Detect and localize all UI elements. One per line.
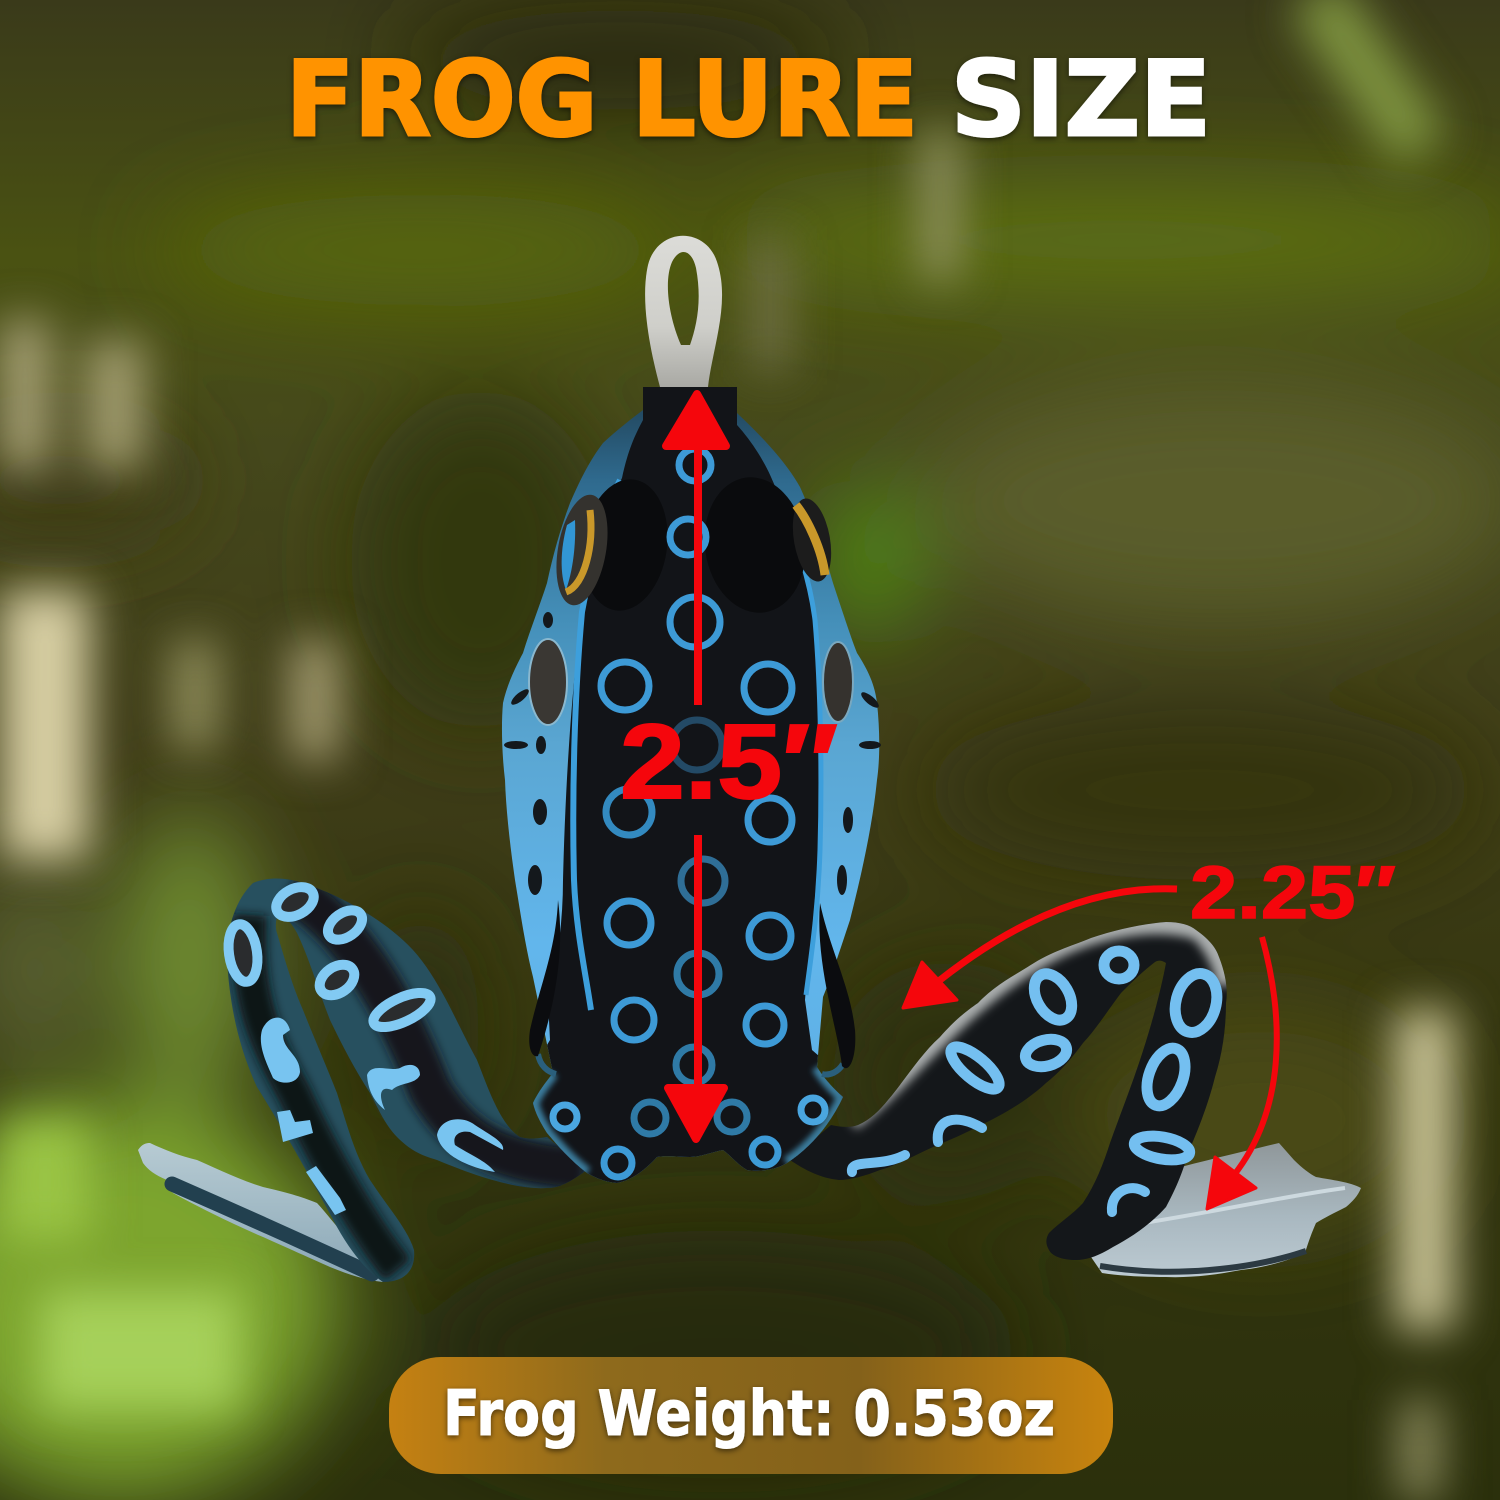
arrow: lower leg measure: [1207, 937, 1277, 1209]
title: FROG LURE: [286, 40, 918, 160]
label: leg length: 2.25″: [1190, 851, 1396, 934]
arrow: vertical 2.5 inch measure: [666, 394, 726, 1139]
weight text: Frog Weight: 0.53oz: [443, 1377, 1055, 1450]
icon: left hook: [529, 900, 560, 1074]
left leg: [220, 870, 595, 1290]
icon: right hook: [819, 903, 855, 1075]
label: body length: 2.5″: [620, 703, 838, 821]
frog body: [495, 385, 890, 1190]
black centre: [533, 387, 843, 1183]
side black marks: [504, 612, 881, 895]
right leg spots: [852, 951, 1223, 1212]
head bumps: [574, 474, 676, 616]
icon: right eye: [787, 496, 837, 584]
arrow: upper leg measure: [903, 889, 1177, 1008]
weight pill: [389, 1357, 1113, 1474]
title: SIZE: [951, 40, 1211, 160]
icon: left eye: [549, 491, 615, 609]
side dark spots: [529, 639, 567, 725]
right leg: [785, 915, 1235, 1265]
left leg spots: [225, 881, 503, 1215]
icon: line tie ring: [645, 236, 722, 387]
blue spots: [553, 449, 825, 1177]
blue sides: [495, 385, 890, 1185]
left foot: [138, 1143, 383, 1282]
lower teal rim: [533, 1067, 843, 1173]
right foot: [1091, 1143, 1361, 1277]
stripes: [573, 480, 620, 1010]
frog lure: [138, 236, 1361, 1290]
